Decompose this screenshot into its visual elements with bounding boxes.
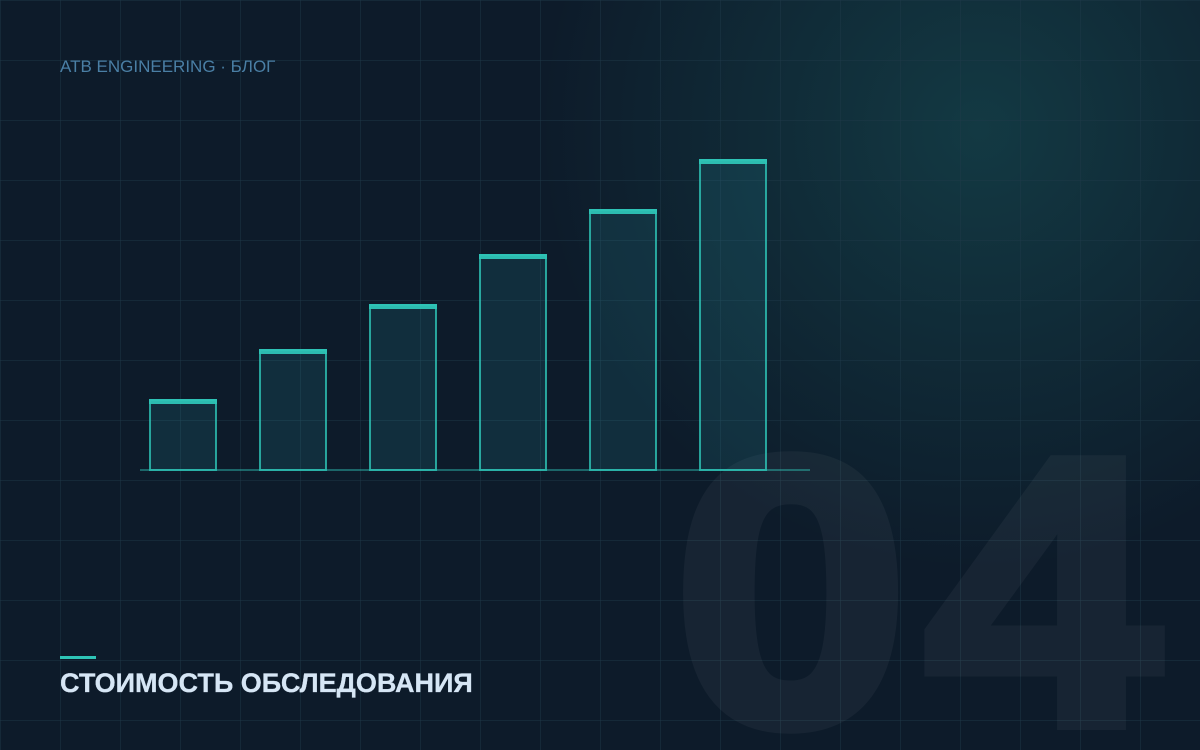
bar 5 (589, 209, 657, 470)
bar 1 (149, 399, 217, 470)
accent bar (60, 656, 96, 659)
bar 2 (259, 349, 327, 470)
bar 3 (369, 304, 437, 470)
chart baseline (140, 469, 810, 471)
bar 6 (699, 159, 767, 470)
bar 4 (479, 254, 547, 470)
bar chart (140, 159, 810, 471)
blog label: ATB ENGINEERING · БЛОГ (60, 57, 275, 76)
title: СТОИМОСТЬ ОБСЛЕДОВАНИЯ (60, 668, 473, 698)
